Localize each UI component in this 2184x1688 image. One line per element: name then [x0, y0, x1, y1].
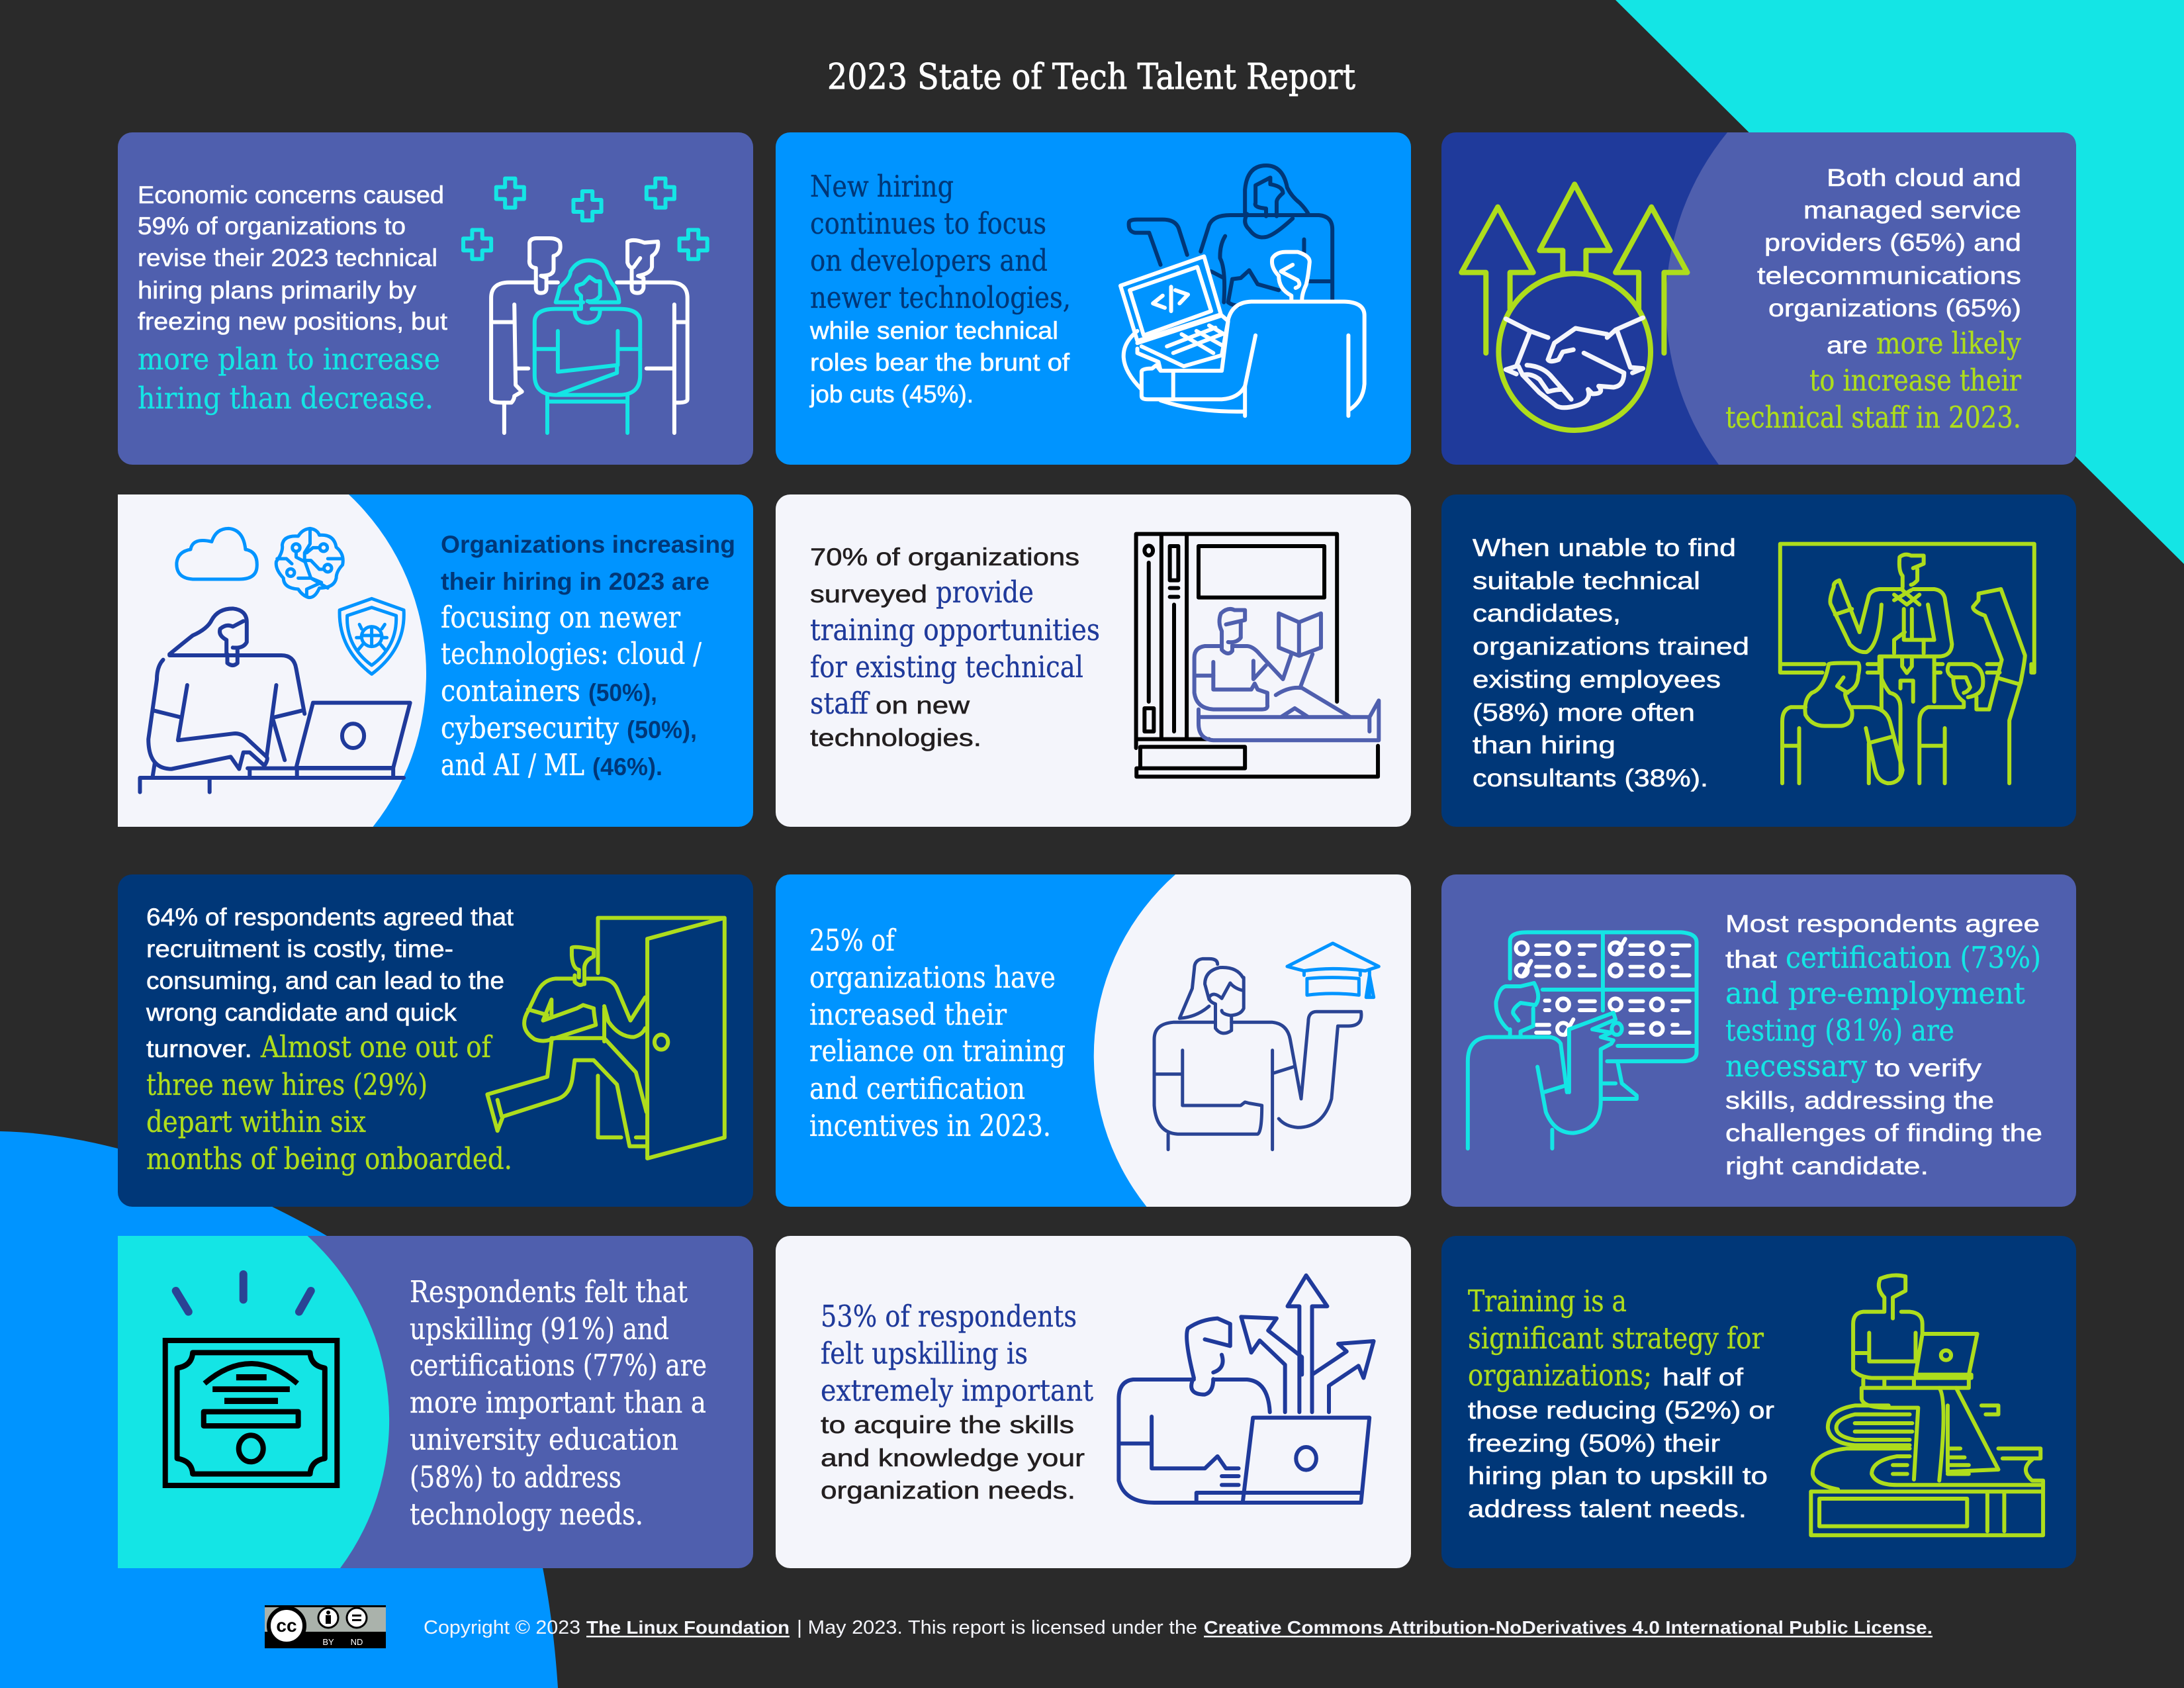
text block: consultants (38%). [1473, 765, 1708, 792]
text block: and certification [809, 1071, 1025, 1106]
footer: copyright text: Creative Commons Attribution-NoDerivatives 4.0 International Public License. [1204, 1617, 1933, 1638]
footer: licence badge: ND [351, 1637, 363, 1647]
text block: than hiring [1473, 731, 1615, 759]
text block: New hiring [810, 169, 954, 204]
text block: 25% of [809, 923, 897, 958]
curved panel overlay [1666, 132, 2076, 465]
text block: recruitment is costly, time- [146, 935, 453, 962]
icon: certificate [165, 1274, 337, 1485]
text block: providers (65%) and [1764, 229, 2021, 256]
text block: three new hires (29%) [146, 1067, 428, 1102]
icon: person reading by bookshelf [1136, 534, 1379, 776]
text block: those reducing (52%) or [1468, 1397, 1774, 1424]
text block: Respondents felt that [410, 1274, 688, 1309]
text block: challenges of finding the [1725, 1119, 2042, 1147]
icon: teacher with students [1780, 544, 2034, 783]
text block: upskilling (91%) and [410, 1311, 669, 1346]
panel: economic concerns [118, 132, 753, 465]
text block: 59% of organizations to [138, 212, 406, 240]
text block [410, 1274, 707, 1532]
panel background [776, 874, 1411, 1207]
text block: (50%), [588, 679, 657, 706]
panel: training opportunities [776, 494, 1411, 827]
panel background [118, 132, 753, 465]
icon: three colleagues with plus signs [463, 179, 707, 433]
text block: turnover. [146, 1035, 252, 1062]
panel background [118, 494, 753, 827]
panel: upskilling versus university [118, 1236, 753, 1568]
text block: Almost one out of [260, 1029, 493, 1064]
text block: (46%). [592, 753, 662, 780]
text block [1468, 1284, 1774, 1523]
icon: developers with laptop [1120, 165, 1365, 416]
text block: technologies. [810, 724, 981, 751]
text block [138, 181, 448, 416]
text block [441, 531, 735, 782]
text block: right candidate. [1725, 1152, 1929, 1180]
text block: provide [936, 575, 1034, 610]
footer: copyright text: The Linux Foundation [586, 1617, 790, 1638]
text block: address talent needs. [1468, 1495, 1747, 1523]
panel background [1441, 874, 2076, 1207]
text block: to acquire the skills [821, 1411, 1074, 1438]
text block: existing employees [1473, 666, 1721, 693]
text block: months of being onboarded. [146, 1141, 512, 1176]
text block: felt upskilling is [821, 1336, 1028, 1371]
panel background [776, 494, 1411, 827]
panel: upskilling importance [776, 1236, 1411, 1568]
text block: Most respondents agree [1725, 910, 2040, 937]
text block [809, 923, 1066, 1143]
text block: on developers and [810, 243, 1048, 278]
text block [809, 169, 1071, 408]
footer: licence badge [265, 1605, 386, 1648]
icon: person at laptop with diverging arrows [1118, 1276, 1374, 1503]
text block: and pre-employment [1725, 976, 2025, 1011]
text block: freezing new positions, but [138, 308, 448, 335]
text block: technologies: cloud / [441, 636, 702, 671]
text block: managed service [1803, 197, 2021, 224]
text block: their hiring in 2023 are [441, 568, 709, 595]
text block: telecommunications [1757, 262, 2021, 289]
text block: organizations have [809, 960, 1056, 995]
title: 2023 State of Tech Talent Report [827, 57, 1355, 97]
text block: incentives in 2023. [809, 1108, 1051, 1143]
text block: 64% of respondents agreed that [146, 904, 514, 931]
text block: Organizations increasing [441, 531, 735, 558]
text block: containers [441, 673, 580, 708]
icon: person leaving through door [487, 918, 725, 1158]
text block: significant strategy for [1468, 1321, 1764, 1356]
panel background [118, 1236, 753, 1568]
text block: more plan to increase [138, 342, 440, 377]
text block: organizations trained [1473, 633, 1749, 660]
text block: cybersecurity [441, 710, 619, 745]
text block: Both cloud and [1827, 164, 2021, 191]
text block: for existing technical [810, 649, 1083, 684]
text block: (58%) to address [410, 1460, 621, 1495]
curved white area [1094, 874, 1411, 1207]
text block: Economic concerns caused [138, 181, 444, 209]
footer: licence badge: BY [322, 1637, 334, 1647]
text block [821, 1299, 1093, 1504]
text block [1725, 910, 2042, 1180]
text block: organizations (65%) [1768, 295, 2021, 322]
text block: and AI / ML [441, 747, 584, 782]
footer: copyright text: | May 2023. This report is licensed under the [797, 1617, 1197, 1638]
text block: on new [876, 692, 970, 719]
text block: roles bear the brunt of [810, 349, 1070, 376]
text block: revise their 2023 technical [138, 244, 437, 271]
text block: reliance on training [809, 1033, 1066, 1068]
curved cyan area [118, 1236, 389, 1568]
panel: costly recruitment [118, 874, 753, 1207]
text block: staff [810, 686, 870, 721]
text block: (58%) more often [1473, 699, 1695, 726]
text block: (50%), [627, 716, 697, 743]
text block: consuming, and can lead to the [146, 967, 504, 994]
text block: suitable technical [1473, 567, 1700, 594]
text block: candidates, [1473, 600, 1621, 627]
curved white area [118, 494, 426, 827]
text block: testing (81%) are [1725, 1013, 1954, 1048]
panel: training as strategy [1441, 1236, 2076, 1568]
text block [1473, 534, 1749, 792]
text block: necessary [1725, 1049, 1868, 1084]
text block: and knowledge your [821, 1444, 1085, 1472]
text block: to increase their [1809, 363, 2021, 398]
panel: certification and testing [1441, 874, 2076, 1207]
panel background [118, 874, 753, 1207]
text block: organization needs. [821, 1477, 1075, 1504]
text block: skills, addressing the [1725, 1087, 1994, 1114]
panel: newer technologies [118, 494, 753, 827]
text block: wrong candidate and quick [146, 999, 457, 1026]
text block: 70% of organizations [810, 543, 1079, 571]
text block: while senior technical [809, 317, 1058, 344]
panel: trained existing employees [1441, 494, 2076, 827]
panel background [776, 1236, 1411, 1568]
icon: handshake with rising arrows [1461, 184, 1687, 430]
text block: technical staff in 2023. [1725, 400, 2021, 435]
text block: hiring plans primarily by [138, 277, 417, 304]
text block: half of [1662, 1364, 1744, 1391]
text block: depart within six [146, 1104, 366, 1139]
panel: new hiring [776, 132, 1411, 465]
text block: continues to focus [810, 206, 1046, 241]
text block: freezing (50%) their [1468, 1430, 1720, 1457]
panel: training and certification incentives [776, 874, 1411, 1207]
text block [146, 904, 514, 1176]
text block: job cuts (45%). [809, 381, 974, 408]
panel background [776, 132, 1411, 465]
text block [810, 543, 1100, 751]
text block: When unable to find [1473, 534, 1736, 561]
text block: certifications (77%) are [410, 1348, 707, 1383]
text block: more likely [1876, 326, 2021, 361]
text block: hiring plan to upskill to [1468, 1462, 1768, 1489]
icon: woman with graduation cap [1154, 943, 1379, 1150]
text block: extremely important [821, 1373, 1093, 1408]
text block: increased their [809, 997, 1007, 1032]
text block: certification (73%) [1786, 940, 2041, 975]
text block: 53% of respondents [821, 1299, 1077, 1334]
icon: person pointing at test screen [1468, 932, 1697, 1149]
text block: that [1725, 946, 1778, 973]
footer: licence badge: cc [276, 1615, 297, 1636]
panel: cloud and telecom hiring [1441, 132, 2076, 465]
panel background [1441, 494, 2076, 827]
text block: are [1827, 332, 1868, 359]
text block: training opportunities [810, 612, 1100, 647]
footer: copyright text: Copyright © 2023 [424, 1617, 580, 1638]
text block: Training is a [1468, 1284, 1627, 1319]
icon: worker with cloud, AI and security [140, 528, 410, 792]
text block: technology needs. [410, 1497, 643, 1532]
text block: newer technologies, [810, 280, 1071, 315]
text block: focusing on newer [441, 600, 680, 635]
icon: person sitting on books [1811, 1275, 2043, 1535]
text block [1725, 164, 2021, 435]
panel background [1441, 1236, 2076, 1568]
text block: to verify [1875, 1055, 1982, 1082]
text block: university education [410, 1422, 678, 1457]
text block: organizations; [1468, 1358, 1652, 1393]
text block: surveyed [810, 581, 927, 608]
text block: hiring than decrease. [138, 381, 433, 416]
panel background [1441, 132, 2076, 465]
footer: copyright text [424, 1617, 1933, 1638]
text block: more important than a [410, 1385, 706, 1420]
